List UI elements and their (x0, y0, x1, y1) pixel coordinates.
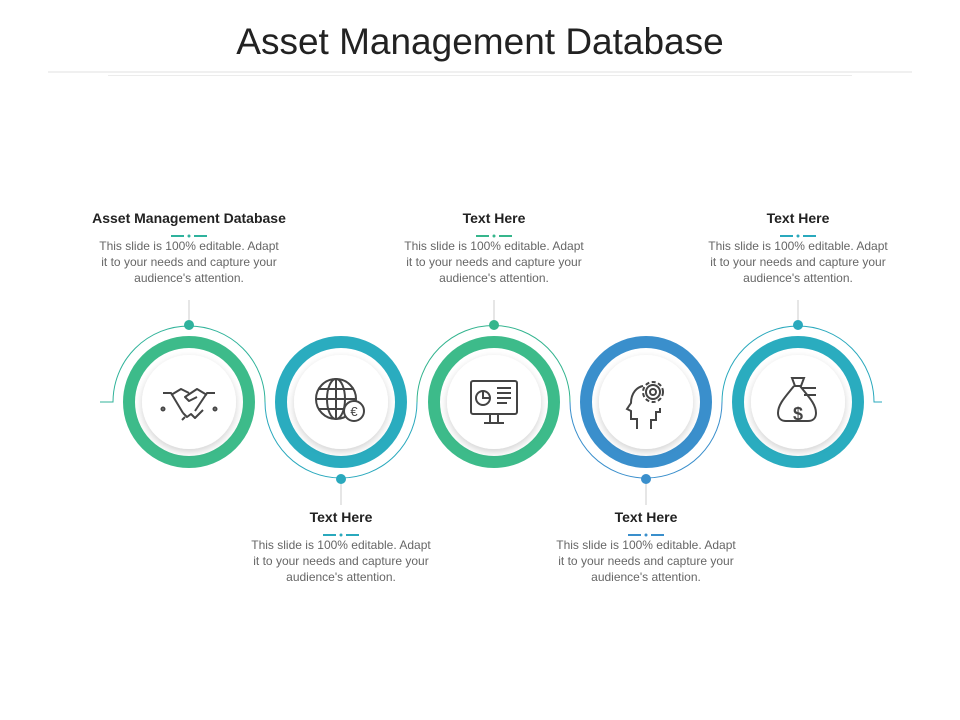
text block 5 (556, 509, 736, 584)
text block 3 (708, 210, 888, 285)
icon: globe euro: € (350, 404, 358, 419)
circle 4 (586, 342, 706, 462)
text block 5: Text Here (615, 509, 677, 525)
icon: head gear (627, 382, 663, 429)
text block 3: Text Here (767, 210, 829, 226)
text block 1: Asset Management Database (92, 210, 286, 226)
connector wave (100, 300, 882, 505)
text block 3: This slide is 100% editable. Adapt it to your needs and capture your audience's attention. (708, 239, 888, 285)
circle 1 (129, 342, 249, 462)
circle 5 (738, 342, 858, 462)
text block 2 (404, 210, 584, 285)
text block 4 (251, 509, 431, 584)
circle 3 (434, 342, 554, 462)
circle 2 (281, 342, 401, 462)
title: Asset Management Database (236, 21, 724, 62)
icon: money bag: $ (793, 404, 803, 424)
text block 4: Text Here (310, 509, 372, 525)
dots (184, 320, 803, 484)
text block 2: This slide is 100% editable. Adapt it to your needs and capture your audience's attention. (404, 239, 584, 285)
text block 4: This slide is 100% editable. Adapt it to your needs and capture your audience's attention. (251, 538, 431, 584)
text block 1: This slide is 100% editable. Adapt it to your needs and capture your audience's attention. (99, 239, 279, 285)
text block 5: This slide is 100% editable. Adapt it to your needs and capture your audience's attention. (556, 538, 736, 584)
text block 1 (92, 210, 286, 285)
icon: monitor (471, 381, 517, 423)
icon: handshake (162, 389, 216, 420)
text block 2: Text Here (463, 210, 525, 226)
